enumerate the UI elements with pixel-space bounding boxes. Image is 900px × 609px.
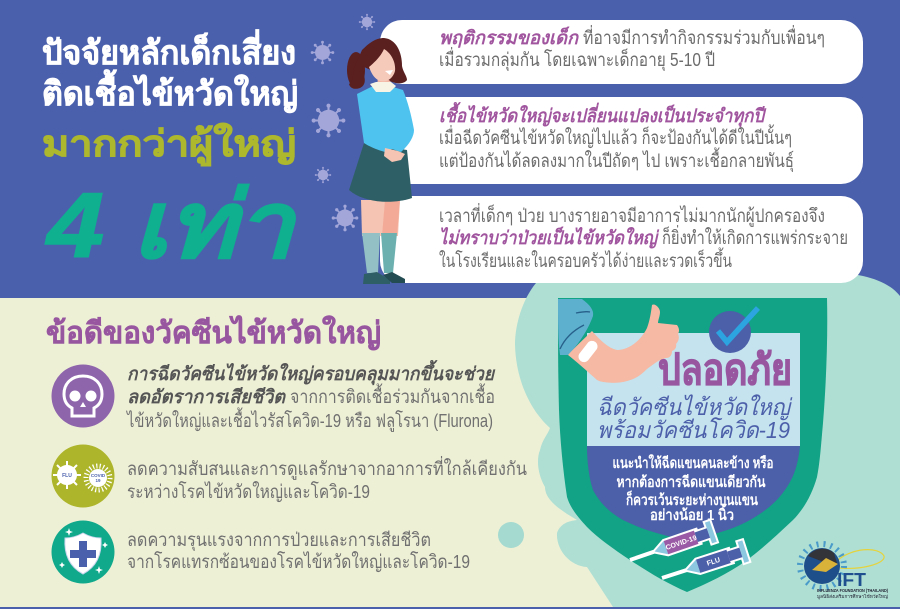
icon: skull xyxy=(52,364,114,428)
icon: flu and covid viruses xyxy=(52,444,114,508)
bottom blue edge xyxy=(0,607,900,609)
icon: flu syringe: FLU xyxy=(706,557,721,568)
panel: card 3: ก็ยิ่งทำให้เกิดการแพร่กระจาย xyxy=(662,225,848,248)
panel: card 3: เวลาที่เด็กๆ ป่วย บางรายอาจมีอาการไม่มากนักผู้ปกครองจึง xyxy=(439,203,825,227)
benefit text 2: ลดความสับสนและการดูแลรักษาจากอาการที่ใกล้เคียงกัน xyxy=(127,456,527,480)
logo: IFT: มูลนิธิส่งเสริมการศึกษาไข้หวัดใหญ่ xyxy=(817,594,888,600)
benefit text 1: ไข้หวัดใหญ่และเชื้อไวรัสโควิด-19 หรือ ฟลูโรนา (Flurona) xyxy=(125,407,493,432)
panel: card 1: พฤติกรรมของเด็ก xyxy=(439,26,580,48)
icon: check mark xyxy=(709,308,758,353)
shield subheading xyxy=(597,394,793,443)
benefit text 2: ระหว่างโรคไข้หวัดใหญ่และโควิด-19 xyxy=(127,481,370,503)
decorative mint circle xyxy=(498,522,524,548)
title xyxy=(42,29,298,167)
benefit text 1 xyxy=(125,360,496,432)
title: ติดเชื้อไข้หวัดใหญ่ xyxy=(42,69,298,113)
panel: card 2: เมื่อฉีดวัคซีนไข้หวัดใหญ่ไปแล้ว ก็จะป้องกันได้ดีในปีนั้นๆ xyxy=(439,124,792,149)
benefit text 1: การฉีดวัคซีนไข้หวัดใหญ่ครอบคลุมมากขึ้นจะช่วย xyxy=(127,360,496,386)
heading: vaccine benefits: ข้อดีของวัคซีนไข้หวัดใหญ่ xyxy=(46,315,381,351)
panel: mint background blob xyxy=(515,270,900,607)
icon: covid syringe xyxy=(626,521,717,570)
shield advice text: อย่างน้อย 1 นิ้ว xyxy=(650,503,734,524)
headline number: 4 times: 4 เท่า xyxy=(45,175,297,277)
benefit text 3: จากโรคแทรกซ้อนของโรคไข้หวัดใหญ่และโควิด-19 xyxy=(127,551,470,573)
benefit text 1: จากการติดเชื้อร่วมกันจากเชื้อ xyxy=(290,383,495,407)
icon: flu and covid viruses: FLU xyxy=(62,473,72,479)
panel: bottom cream background xyxy=(0,298,900,607)
panel: card 3: ไม่ทราบว่าป่วยเป็นไข้หวัดใหญ่ xyxy=(439,226,660,249)
panel: card 1: เมื่อรวมกลุ่มกัน โดยเฉพาะเด็กอายุ 5-10 ปี xyxy=(439,47,715,72)
shield heading: ปลอดภัย xyxy=(658,346,792,393)
icon: arm with thumbs up xyxy=(558,299,679,383)
benefit text 2 xyxy=(127,456,527,503)
icon: flu and covid viruses: COVID xyxy=(91,473,106,478)
benefit text 3: ลดความรุนแรงจากการป่วยและการเสียชีวิต xyxy=(127,529,431,552)
panel: card 2: แต่ป้องกันได้ลดลงมากในปีถัดๆ ไป เพราะเชื้อกลายพันธุ์ xyxy=(439,147,794,173)
logo: IFT xyxy=(800,544,888,600)
logo: IFT: IFT xyxy=(837,570,866,590)
title: มากกว่าผู้ใหญ่ xyxy=(42,122,296,167)
panel: top blue background xyxy=(0,0,900,298)
icon: flu and covid viruses: 19 xyxy=(95,478,101,483)
shield advice text: แนะนำให้ฉีดแขนคนละข้าง หรือ xyxy=(612,454,774,472)
shield inner blue area xyxy=(587,446,800,540)
title: ปัจจัยหลักเด็กเสี่ยง xyxy=(42,29,296,71)
illustration: girl xyxy=(347,38,414,284)
icon: covid syringe: COVID-19 xyxy=(665,535,698,552)
panel: card 2 xyxy=(380,97,863,184)
panel: card 1 xyxy=(380,20,863,84)
panel: safety shield xyxy=(558,298,827,592)
panel: card 3: ในโรงเรียนและในครอบครัวได้ง่ายและรวดเร็วขึ้น xyxy=(439,247,732,271)
icon: flu syringe xyxy=(659,540,749,588)
shield advice text: ก็ควรเว้นระยะห่างบนแขน xyxy=(626,490,759,509)
logo: IFT: INFLUENZA FOUNDATION (THAILAND) xyxy=(817,588,888,593)
icon: shield with cross xyxy=(52,520,114,584)
icons: viruses xyxy=(311,14,375,231)
shield advice text xyxy=(612,454,774,524)
panel: card 2: เชื้อไข้หวัดใหญ่จะเปลี่ยนแปลงเป็นประจำทุกปี xyxy=(439,102,767,128)
shield advice text: หากต้องการฉีดแขนเดียวกัน xyxy=(616,474,766,491)
panel: card 3 xyxy=(380,196,863,283)
benefit text 1: ลดอัตราการเสียชีวิต xyxy=(127,386,287,407)
shield subheading: พร้อมวัคซีนโควิด-19 xyxy=(597,417,790,443)
panel: card 1: ที่อาจมีการทำกิจกรรมร่วมกับเพื่อนๆ xyxy=(583,25,825,48)
shield inner light blue xyxy=(587,333,800,446)
benefit text 3 xyxy=(127,529,470,573)
shield subheading: ฉีดวัคซีนไข้หวัดใหญ่ xyxy=(597,394,793,421)
